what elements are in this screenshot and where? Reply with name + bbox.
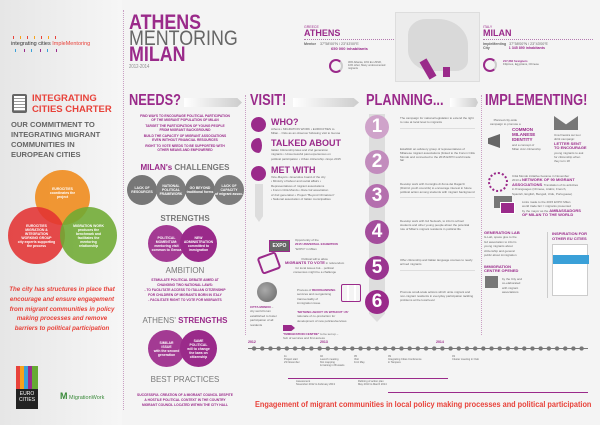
icon: expo bbox=[269, 240, 290, 252]
timeline: Cluster meeting in Oslo bbox=[452, 358, 479, 361]
title: ATHENS bbox=[129, 11, 201, 34]
timeline: 11 bbox=[284, 355, 287, 358]
step 6: 6 bbox=[372, 291, 382, 312]
text: inspiration: OTHER EU CITIES bbox=[552, 236, 587, 240]
logo: integrating cities bbox=[11, 36, 90, 52]
circles: challenges: RESOURCES bbox=[131, 190, 153, 194]
panel: implementing: Planned city-wide bbox=[494, 118, 517, 122]
panel: visit: • Forum Città Mondo • Rete G2 association bbox=[271, 188, 328, 192]
panel: implementing: by the City and bbox=[502, 277, 522, 281]
circle: migration work bbox=[60, 207, 117, 264]
panel: implementing: with migrant bbox=[502, 286, 518, 290]
icon: vote hand bbox=[257, 251, 281, 275]
panel: implementing: campaign to promote a bbox=[490, 122, 521, 126]
map bbox=[395, 12, 480, 82]
timeline: 03 bbox=[452, 355, 455, 358]
logo: eurocities: CITIES bbox=[19, 397, 35, 403]
panel: needs: immigration bbox=[189, 248, 208, 252]
text: needs list: EVEN WITHOUT FINANCIAL RESOURCES bbox=[152, 138, 218, 142]
panel: milan info: MILAN bbox=[483, 28, 512, 38]
text: inspiration: INSPIRATION FOR bbox=[552, 231, 587, 236]
circle: working group: city experts supporting bbox=[18, 240, 55, 244]
step 6 bbox=[365, 290, 389, 314]
panel: milan info: ITALY bbox=[483, 25, 492, 29]
panel: visit: migrants • Unsuccessful past experiences on bbox=[271, 152, 331, 156]
panel: needs: FRAMEWORK bbox=[160, 192, 182, 196]
text: generation lab: public about immigration bbox=[484, 253, 517, 257]
panel: needs: POLITICAL bbox=[158, 236, 175, 240]
heading: athens' strengths: ATHENS' STRENGTHS bbox=[143, 316, 227, 325]
panel: milan info: ImpleMenting 37°58′00″N / 23°43′00″E bbox=[483, 42, 548, 46]
panel: athens info: GREECE bbox=[304, 25, 319, 29]
divider bbox=[123, 10, 124, 410]
panel: implementing: they turn 18 bbox=[554, 159, 570, 163]
heading: milan's challenges: MILAN's CHALLENGES bbox=[140, 163, 230, 172]
panel: planning steps: Establish an advisory group of representatives of Milanese migrant associations (linked to the Forum Città Mondo and connected to the 2015 EXPO world trade fair bbox=[400, 147, 475, 162]
text: needs list: FIND WAYS TO ENCOURAGE POLITICAL PARTICIPATION bbox=[140, 114, 230, 118]
circles: challenges: LACK OF bbox=[134, 186, 150, 190]
heading: best practices: BEST PRACTICES bbox=[151, 375, 219, 384]
step 2: 2 bbox=[372, 151, 382, 172]
left column background bbox=[0, 0, 122, 425]
text: needs list: BUILD THE CAPACITY OF MIGRANT ASSOCIATIONS bbox=[144, 134, 226, 138]
panel: athens info: 30% Albania, 10% Ex-USSR, bbox=[348, 61, 382, 64]
panel: planning steps: Promote small-scale actions which unite migrant and non-migrant residents in everyday participation tackling problems at the local level bbox=[400, 290, 473, 302]
panel: needs: LACK OF bbox=[221, 184, 237, 188]
text: generation lab: young migrants about bbox=[484, 244, 513, 248]
title: 2012-2014 bbox=[129, 64, 149, 70]
icon: charter document bbox=[12, 94, 27, 113]
panel: athens info: ATHENS bbox=[304, 28, 340, 38]
text: needs list: RIGHT TO VOTE NEEDS TO BE SUPPORTED WITH bbox=[145, 144, 225, 148]
title: MILAN bbox=[129, 43, 186, 66]
heading: integrating cities charter: INTEGRATING bbox=[32, 93, 97, 104]
panel: visit: residents bbox=[250, 323, 262, 327]
circles: challenges bbox=[127, 175, 157, 205]
timeline: November 2012 to February 2013 bbox=[296, 383, 335, 386]
panel: implementing: young migrants to ask bbox=[554, 151, 583, 155]
text: commitment: OUR COMMITMENT TO bbox=[11, 120, 95, 129]
circle: working group: MIGRATION & bbox=[25, 228, 48, 232]
panel: implementing: diritti campaign: bbox=[554, 137, 575, 141]
panel: visit: city world forum bbox=[250, 309, 271, 313]
panel: needs: POLITICAL bbox=[190, 342, 207, 346]
panel: visit: participation of all bbox=[250, 318, 273, 322]
panel: needs: A HOSTILE POLITICAL CONTEXT IN THE COUNTRY bbox=[144, 398, 226, 402]
text: commitment: EUROPEAN CITIES bbox=[11, 150, 81, 159]
panel: needs: will to change bbox=[187, 346, 210, 350]
panel: visit: Process of REORGANISING bbox=[297, 288, 336, 292]
title: MENTORING bbox=[129, 27, 238, 50]
timeline: Launch meeting bbox=[320, 358, 338, 361]
circle: migration work: relationship bbox=[79, 244, 98, 248]
logo: migration work: M MigrationWork bbox=[60, 391, 104, 401]
panel: implementing bbox=[484, 116, 589, 298]
timeline: & training in Brussels bbox=[320, 364, 344, 367]
timeline: 2014 bbox=[436, 340, 444, 344]
panel: visit: development of new policies/services bbox=[297, 319, 347, 323]
panel: visit: of 2nd generation • Project "Beyond Chinatown" bbox=[271, 193, 335, 197]
panel: implementing: OF MILAN TO THE WORLD bbox=[522, 212, 573, 217]
circle: working group: EUROCITIES bbox=[26, 224, 47, 228]
panel: needs: the laws on bbox=[189, 350, 208, 354]
timeline: 09 bbox=[388, 355, 391, 358]
step 4: 4 bbox=[372, 221, 382, 242]
image: report cover bbox=[552, 244, 588, 296]
heading: planning: PLANNING... bbox=[366, 92, 444, 109]
step 3 bbox=[365, 184, 389, 208]
panel: athens info: 10% other, Many undocumented bbox=[348, 64, 385, 67]
panel: visit: Opportunity of the bbox=[295, 238, 319, 242]
panel: visit: Representatives of migrant associations bbox=[271, 184, 324, 188]
timeline: 23 November bbox=[284, 361, 300, 364]
circle: working group: the process bbox=[27, 244, 46, 248]
heading: integrating cities charter bbox=[32, 93, 112, 115]
timeline: May 2013 to March 2014 bbox=[358, 383, 387, 386]
panel: planning steps bbox=[365, 114, 475, 322]
panel: implementing: Spanish, English, Bengali, Urdu, Portuguese) bbox=[512, 192, 572, 196]
circle: migration work: facilitates the bbox=[78, 236, 99, 240]
logo: integrating cities: integrating cities ImpleMentoring bbox=[11, 41, 90, 47]
panel: implementing: Una finestra sui tuoi bbox=[554, 133, 581, 137]
text: needs list: TARGET THE PARTICIPATION OF YOUNG PEOPLE bbox=[145, 124, 225, 128]
circle: eurocities bbox=[35, 170, 90, 225]
circle: migration work: mentoring bbox=[80, 240, 97, 244]
circle: working group: INTEGRATION bbox=[25, 232, 48, 236]
heading: needs: NEEDS? bbox=[129, 92, 181, 109]
panel: athens info: migrants bbox=[348, 67, 358, 70]
panel: needs: citizenship bbox=[190, 354, 207, 358]
panel: needs: ADMINISTRATION bbox=[184, 240, 213, 244]
circle: migration work: benchmark and bbox=[76, 232, 101, 236]
panel: needs: MIGRANT COUNCIL LOCATED WITHIN THE CITY HALL bbox=[142, 403, 228, 407]
circle: working group bbox=[8, 207, 65, 264]
panel: needs: - FACILITATE RIGHT TO VOTE FOR MIGRANTS bbox=[148, 298, 222, 302]
text: inspiration bbox=[547, 232, 595, 298]
step 5 bbox=[365, 256, 389, 280]
panel: implementing: ASSOCIATIONS. Translation of its activities bbox=[512, 182, 578, 187]
timeline: Project start bbox=[284, 358, 298, 361]
logo: eurocities bbox=[16, 366, 38, 409]
panel: visit: MET WITH bbox=[271, 165, 316, 175]
icon: talked about bbox=[251, 138, 266, 153]
panel: implementing: and a concept of bbox=[512, 143, 534, 147]
text: generation lab: G-Lab, space give to the bbox=[484, 235, 517, 239]
panel: implementing: Milan civic citizenship bbox=[512, 147, 541, 151]
panel: visit: Athens • MIGRATION WORK • EUROCITIES to bbox=[271, 127, 334, 131]
heading: ambition: AMBITION bbox=[166, 266, 204, 275]
circle: eurocities: coordinates the bbox=[50, 190, 75, 194]
timeline: 02 bbox=[320, 355, 323, 358]
panel: needs: SIMILAR bbox=[160, 340, 173, 344]
text: needs list: OTHER MEANS AND EMPOWERED bbox=[157, 148, 213, 152]
text: needs list: OF THE MIGRANT POPULATION OF MILAN bbox=[151, 118, 219, 122]
panel: implementing: Città Mondo initiative became in November bbox=[512, 174, 569, 178]
panel: visit: transversality of bbox=[297, 297, 318, 301]
panel: needs: - TO FACILITATE ACCESS TO ITALIAN CITIZENSHIP bbox=[144, 288, 226, 292]
panel: needs: NATIONAL bbox=[162, 184, 180, 188]
panel: implementing: 2013 a NETWORK OF 90 MIGRANT bbox=[512, 177, 575, 182]
panel: milan info: City 1 345 890 inhabitants bbox=[483, 46, 545, 50]
panel: milan info: 217,284 foreigners bbox=[503, 59, 528, 63]
panel: athens info bbox=[304, 25, 394, 73]
panel: needs: MOMENTUM: bbox=[156, 240, 177, 244]
panel: implementing: in 8 languages (Chinese, Arabic, French, bbox=[512, 187, 566, 191]
panel: implementing: world trade fair = migrants presented bbox=[522, 204, 571, 208]
panel: visit: Milan... Oslo as an observer following visit to Genoa bbox=[271, 131, 340, 135]
panel: implementing: LETTER SENT bbox=[554, 141, 581, 146]
timeline: 2012 bbox=[248, 340, 256, 344]
heading: visit: VISIT! bbox=[250, 92, 286, 109]
step 5: 5 bbox=[372, 257, 382, 278]
text: needs list bbox=[140, 114, 230, 152]
panel: implementing: for citizenship when bbox=[554, 155, 580, 159]
text: generation lab: G2 association to inform bbox=[484, 240, 516, 244]
panel: needs: FOR CHILDREN OF MIGRANTS BORN IN ITALY bbox=[148, 293, 222, 297]
timeline bbox=[248, 340, 588, 393]
panel: implementing: COMMON bbox=[512, 127, 533, 132]
panel: needs: common to Genoa bbox=[152, 248, 181, 252]
step 1: 1 bbox=[372, 116, 382, 137]
heading: implementing: IMPLEMENTING! bbox=[485, 92, 587, 109]
panel: visit: 'NOTHING ABOUT US WITHOUT US' bbox=[297, 310, 348, 314]
panel: visit: Italian Citizenship laws and 2nd generation bbox=[271, 148, 328, 152]
footer title: Engagement of migrant communities in local policy making processes and political participation bbox=[255, 400, 591, 409]
circle: eurocities: EUROCITIES bbox=[52, 186, 73, 190]
panel: visit: rationale of co-production for bbox=[297, 314, 335, 318]
icon: globe bbox=[257, 282, 277, 302]
text: red italic statement: The city has structures in place that encourage and ensure engagement from migrant communities in policy making processes and remove barriers to political participation bbox=[9, 286, 115, 332]
panel: visit: CITTA MONDO – bbox=[250, 305, 273, 309]
panel: visit: services and reorganising bbox=[297, 292, 331, 296]
circle: working group: WORKING GROUP bbox=[21, 236, 52, 240]
text: commitment: INTEGRATING MIGRANT bbox=[11, 130, 100, 139]
panel: planning steps: The campaign for national legislation to extend the right to vote at local level to migrants bbox=[400, 116, 474, 124]
icon: envelope bbox=[554, 116, 578, 130]
panel: needs: mentoring visit bbox=[154, 244, 179, 248]
panel: needs: of migrant assoc. bbox=[215, 192, 243, 196]
panel: visit: hub of services and first access bbox=[283, 336, 325, 340]
text: generation lab: GENERATION LAB bbox=[484, 230, 520, 235]
text: immigration centre bbox=[484, 264, 518, 273]
panel: planning steps: Develop work with Consiglio di Zona dei Ragazzi (District youth councils) to encourage interest in future political action among students with migrant background bbox=[400, 182, 475, 194]
timeline: first mapping bbox=[320, 361, 335, 364]
icon: who bbox=[251, 117, 266, 132]
text: needs list: FROM MIGRANT BACKGROUND bbox=[159, 128, 211, 132]
timeline: Assessment bbox=[296, 380, 310, 383]
panel: needs: SUCCESSFUL CREATION OF A MIGRANT COUNCIL DESPITE bbox=[137, 393, 233, 397]
panel: needs: traditional forms bbox=[187, 190, 213, 194]
timeline: 2013 bbox=[320, 340, 328, 344]
arrow: immigration centre bbox=[283, 325, 295, 331]
panel: needs: ISSUE bbox=[161, 344, 172, 348]
panel: implementing: by the mayor as the AMBASSADORS bbox=[522, 208, 581, 213]
panel: needs bbox=[127, 114, 244, 407]
panel: needs: POLITICAL bbox=[162, 188, 180, 192]
timeline: Refining of action plan bbox=[358, 380, 384, 383]
panel: needs: GO BEYOND bbox=[190, 186, 210, 190]
step 4 bbox=[365, 220, 389, 244]
circle: migration work: produces the bbox=[78, 228, 99, 232]
icon: megaphone bbox=[488, 134, 500, 148]
panel: athens info: 650 000 inhabitants bbox=[331, 46, 368, 51]
heading: integrating cities charter: CITIES CHARTER bbox=[32, 104, 112, 115]
panel: visit: • National association of Italian municipalities bbox=[271, 197, 331, 201]
panel: visit: "IMMIGRATION CENTRE" to be set up – bbox=[283, 332, 338, 336]
heading: strengths: STRENGTHS bbox=[160, 214, 210, 223]
icon: network bbox=[488, 172, 508, 192]
panel: visit: 2015 UNIVERSAL EXHIBITION bbox=[295, 242, 338, 246]
panel: milan info bbox=[483, 25, 593, 72]
panel: visit: immigration issue bbox=[297, 301, 320, 305]
timeline: 9-11 May bbox=[354, 361, 365, 364]
panel: visit: established to foster bbox=[250, 314, 277, 318]
panel: planning steps: Offer citizenship and Italian language courses to newly arrived migrants bbox=[400, 258, 472, 266]
circle: eurocities: project bbox=[57, 194, 68, 198]
panel: milan info: Filipinos, Egyptians, Chinese bbox=[503, 62, 539, 66]
logo: eurocities: EURO bbox=[20, 391, 34, 397]
step 2 bbox=[365, 150, 389, 174]
text: generation lab: citizenship and general bbox=[484, 249, 515, 253]
circle: migration work: MIGRATION WORK bbox=[73, 224, 104, 228]
timeline: Integrating Cities Conference bbox=[388, 358, 422, 361]
panel: visit bbox=[250, 117, 361, 340]
panel: implementing: Links made to the 2015 EXPO Milan bbox=[522, 200, 570, 204]
panel: needs: committed to bbox=[188, 244, 209, 248]
panel: visit: WHO? bbox=[271, 117, 298, 127]
text: commitment bbox=[11, 120, 100, 159]
panel: visit: TALKED ABOUT bbox=[271, 138, 341, 148]
timeline: Visit bbox=[354, 358, 359, 361]
panel: needs: CHANGING TWO NATIONAL LAWS: bbox=[157, 283, 213, 287]
panel: implementing: IDENTITY bbox=[512, 137, 533, 142]
icon: speech bubbles bbox=[494, 196, 512, 208]
timeline: 05 bbox=[354, 355, 357, 358]
panel: implementing: TO ENCOURAGE bbox=[554, 145, 587, 150]
panel: visit: Political will to allow bbox=[301, 257, 328, 261]
text: commitment: COMMUNITIES IN bbox=[11, 140, 75, 149]
panel: visit: Vice-Mayors • Executive board of the city bbox=[271, 175, 326, 179]
panel: implementing: associations bbox=[502, 290, 519, 294]
text: immigration centre: CENTRE OPENED bbox=[484, 268, 518, 273]
step 3: 3 bbox=[372, 185, 382, 206]
text: immigration centre: IMMIGRATION bbox=[484, 264, 511, 269]
timeline: in Tampere bbox=[388, 361, 401, 364]
icon: met with bbox=[251, 166, 266, 181]
panel: needs: with the second bbox=[154, 348, 179, 352]
panel: implementing: co-elaborated bbox=[502, 281, 520, 285]
panel: needs: NEW bbox=[195, 236, 202, 240]
text: generation lab bbox=[484, 230, 520, 257]
panel: needs: CAPACITY bbox=[220, 188, 238, 192]
panel: visit: for local issues but... political bbox=[296, 266, 334, 270]
title bbox=[129, 11, 238, 70]
venn diagram bbox=[8, 170, 117, 264]
panel: needs: SAME bbox=[194, 338, 203, 342]
step 1 bbox=[365, 115, 389, 139]
panel: visit: political participation • Urban citizenship • Expo 2015 bbox=[271, 157, 341, 161]
panel: athens info: Mentor 37°58′00″N / 23°43′00″E bbox=[304, 42, 359, 46]
panel: visit: "EXPO" in Milan bbox=[295, 247, 317, 251]
panel: implementing: MILANESE bbox=[512, 132, 535, 137]
panel: visit: • Ministry of labour and social affairs • bbox=[271, 179, 321, 183]
panel: needs: generation bbox=[158, 352, 175, 356]
icon: expo: EXPO bbox=[273, 243, 286, 249]
panel: visit: MIGRANTS TO VOTE in referendum bbox=[285, 260, 344, 265]
panel: planning steps: Develop work with G2 Network, to inform school students and other young people about the potential role of Milan's migrant residents in political life bbox=[400, 219, 469, 231]
panel: needs: STIMULATE POLITICAL DEBATE AIMED AT bbox=[151, 278, 219, 282]
panel: visit: consensus might be a challenge bbox=[293, 270, 336, 274]
